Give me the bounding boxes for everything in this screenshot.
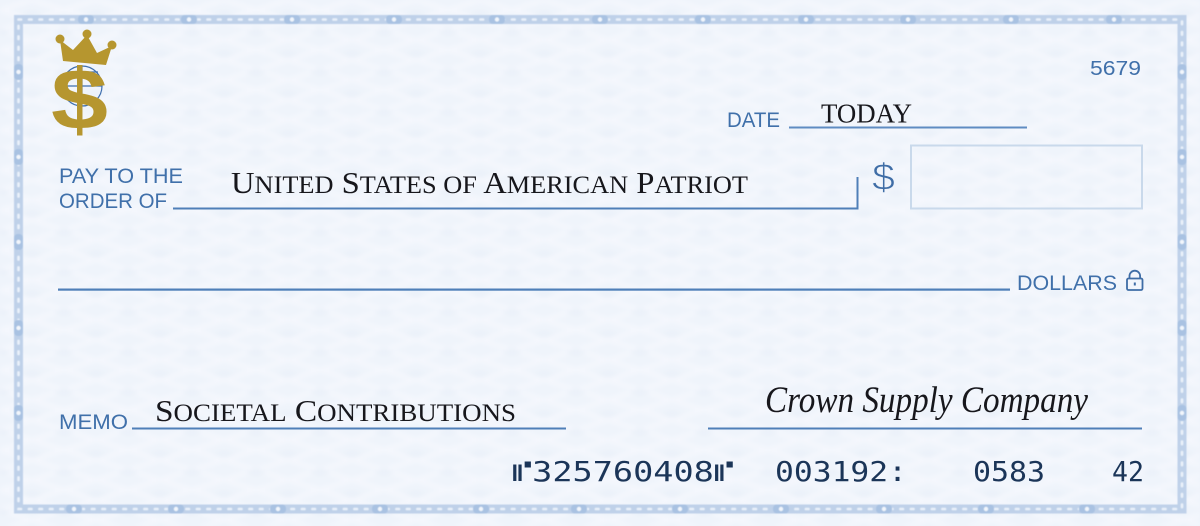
amount box — [911, 146, 1142, 208]
dollar symbol: $ — [872, 157, 895, 199]
account number: 003192: — [775, 455, 907, 488]
routing number: ⑈325760408⑈ — [512, 455, 734, 488]
memo field — [59, 393, 566, 434]
date line — [789, 126, 1027, 128]
payee field — [59, 164, 858, 213]
MICR line — [512, 455, 1144, 488]
check serial: 0583 — [973, 455, 1045, 488]
dollars label: DOLLARS — [1017, 271, 1117, 295]
check number: 5679 — [1090, 58, 1141, 80]
icon: globe — [62, 66, 102, 106]
payee line — [173, 177, 858, 208]
memo line — [132, 428, 566, 430]
amount field — [872, 146, 1142, 208]
pay to the order of label: PAY TO THE — [59, 164, 183, 188]
payee value: UNITED STATES OF AMERICAN PATRIOT — [231, 165, 748, 200]
signature: Crown Supply Company — [765, 380, 1089, 421]
memo label: MEMO — [59, 411, 128, 434]
pay to the order of label — [59, 164, 183, 213]
signature line — [708, 428, 1142, 430]
date field — [727, 98, 1027, 132]
check digits: 42 — [1112, 455, 1144, 488]
icon: dollar sign: $ — [51, 52, 108, 148]
logo: crowned dollar sign over globe — [51, 30, 116, 148]
date value: TODAY — [821, 98, 912, 128]
date label: DATE — [727, 109, 780, 132]
icon: padlock — [1127, 271, 1142, 290]
icon: crown — [56, 30, 116, 65]
memo value: SOCIETAL CONTRIBUTIONS — [155, 393, 516, 428]
dollars line — [58, 271, 1142, 295]
pay to the order of label: ORDER OF — [59, 189, 167, 213]
